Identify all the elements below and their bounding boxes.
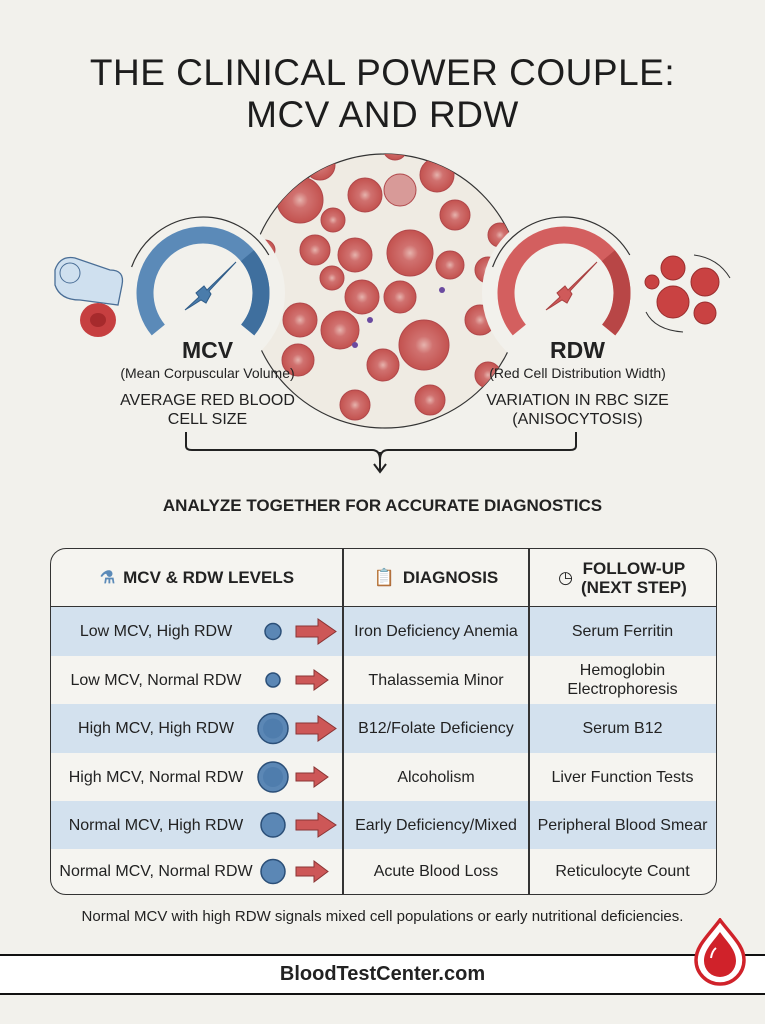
row 3: B12/Folate Deficiency [358, 720, 514, 737]
row 2: Thalassemia Minor [368, 672, 504, 688]
subheading: ANALYZE TOGETHER FOR ACCURATE DIAGNOSTICS [163, 496, 602, 515]
row 5: Normal MCV, High RDW [69, 816, 243, 834]
MCV label block: AVERAGE RED BLOOD [120, 392, 295, 409]
MCV label block [120, 337, 295, 428]
row 1 [51, 607, 716, 656]
icon: tape measure and red cell [55, 258, 122, 337]
table header: MCV & RDW LEVELS [123, 568, 294, 587]
footnote: Normal MCV with high RDW signals mixed cell populations or early nutritional deficiencies. [82, 908, 683, 925]
row 1: Serum Ferritin [572, 623, 673, 640]
row 5: Early Deficiency/Mixed [355, 816, 517, 834]
RDW label block: RDW [550, 337, 605, 363]
icon: blood drop logo [694, 918, 746, 986]
row 2: Electrophoresis [567, 681, 678, 698]
title: THE CLINICAL POWER COUPLE: [90, 52, 675, 93]
row 4: High MCV, Normal RDW [69, 768, 243, 786]
table header: 📋 [374, 568, 395, 587]
table header: (NEXT STEP) [581, 578, 687, 596]
title [90, 52, 675, 135]
bracket arrow [186, 432, 576, 472]
row 6: Acute Blood Loss [374, 863, 498, 880]
row 3: High MCV, High RDW [78, 720, 234, 737]
illustration: blood smear and gauges [54, 153, 730, 474]
row 2 [70, 662, 678, 698]
RDW label block: (Red Cell Distribution Width) [489, 365, 666, 381]
MCV label block: MCV [182, 337, 233, 363]
row 2: Low MCV, Normal RDW [70, 672, 242, 688]
row 1: Low MCV, High RDW [80, 623, 232, 640]
row 6: Normal MCV, Normal RDW [59, 863, 253, 880]
table header: DIAGNOSIS [403, 568, 498, 587]
table [50, 548, 717, 895]
blood smear circle [260, 153, 510, 429]
title: MCV AND RDW [246, 94, 519, 135]
row 4 [69, 761, 694, 793]
gauge: RDW red [482, 211, 646, 375]
row 2: Hemoglobin [580, 662, 665, 679]
row 4: Alcoholism [397, 768, 475, 786]
RDW label block: VARIATION IN RBC SIZE [486, 392, 669, 409]
icon: varied red cells [645, 255, 730, 332]
row 1: Iron Deficiency Anemia [354, 623, 518, 640]
row 5 [51, 801, 716, 849]
table header: FOLLOW-UP [583, 558, 685, 578]
RDW label block [486, 337, 669, 428]
row 6 [59, 858, 690, 884]
row 5: Peripheral Blood Smear [538, 816, 707, 834]
row 3: Serum B12 [582, 720, 663, 737]
MCV label block: CELL SIZE [168, 411, 247, 428]
gauge: MCV blue [121, 211, 285, 375]
RDW label block: (ANISOCYTOSIS) [512, 411, 643, 428]
MCV label block: (Mean Corpuscular Volume) [120, 365, 295, 381]
row 4: Liver Function Tests [552, 768, 694, 786]
table header: ⚗ [100, 568, 115, 587]
table header: ◷ [558, 568, 573, 587]
table header [51, 549, 716, 607]
row 3 [51, 704, 716, 753]
footer band [0, 954, 765, 995]
row 6: Reticulocyte Count [555, 863, 690, 880]
footer band: BloodTestCenter.com [280, 963, 485, 985]
